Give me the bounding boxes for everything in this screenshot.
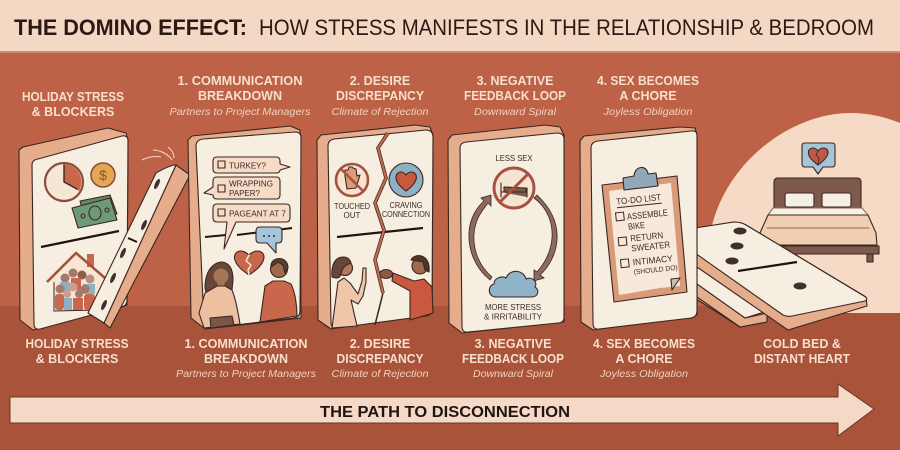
text: craving connection: CONNECTION <box>382 210 430 219</box>
icon: clipboard <box>602 167 687 302</box>
labels: bottom row <box>26 337 850 380</box>
icon: heart in circle <box>389 163 423 197</box>
icon: clock <box>45 163 83 201</box>
domino 2: communication breakdown <box>188 126 301 329</box>
to-do list text: ASSEMBLE <box>626 208 668 222</box>
labels: top row: A CHORE <box>619 89 677 103</box>
labels: bottom row: 3. NEGATIVE <box>475 337 551 351</box>
labels: top row: FEEDBACK LOOP <box>464 89 566 103</box>
to-do list text: INTIMACY <box>632 253 673 267</box>
bubble: pageant at 7: PAGEANT AT 7 <box>229 210 287 218</box>
labels: top row <box>22 74 699 119</box>
labels: top row: Partners to Project Managers <box>170 106 311 118</box>
labels: top row: 1. COMMUNICATION <box>178 74 302 88</box>
text: touched out <box>334 202 370 220</box>
labels: bottom row: 1. COMMUNICATION <box>184 337 308 351</box>
to-do list text: (SHOULD DO) <box>634 265 678 276</box>
bubble: ellipsis <box>256 227 282 253</box>
labels: bottom row: FEEDBACK LOOP <box>462 352 564 366</box>
labels: top row: 4. SEX BECOMES <box>597 74 699 88</box>
domino: fallen upper <box>695 222 867 330</box>
bubble: wrapping paper <box>204 177 280 199</box>
icon: coin: $ <box>99 167 107 183</box>
arrow: the path to disconnection: THE PATH TO DISCONNECTION <box>320 404 570 421</box>
labels: top row: DISCREPANCY <box>336 89 425 103</box>
labels: top row: 3. NEGATIVE <box>477 74 553 88</box>
icon: bed <box>760 178 879 262</box>
motion lines <box>142 147 174 160</box>
bubble: turkey: TURKEY? <box>229 162 267 170</box>
labels: top row: Joyless Obligation <box>602 106 693 118</box>
text: more stress and irritability: & IRRITABILITY <box>484 312 542 322</box>
to-do list text: RETURN <box>630 230 664 244</box>
text: touched out: TOUCHED <box>334 202 370 211</box>
icon: hand with prohibition <box>336 164 368 196</box>
icon: no bed <box>494 168 534 208</box>
bed scene backdrop <box>709 113 900 313</box>
figure: woman <box>199 262 240 328</box>
text: touched out: OUT <box>344 211 361 220</box>
text: craving connection <box>382 201 430 219</box>
labels: bottom row: BREAKDOWN <box>204 352 288 366</box>
bubble: turkey <box>213 157 290 173</box>
icon: money <box>72 195 117 228</box>
header band <box>0 0 900 53</box>
to-do list text: TO-DO LIST <box>616 192 662 207</box>
text: craving connection: CRAVING <box>390 201 422 210</box>
bubble: wrapping paper: WRAPPING <box>229 180 273 188</box>
labels: bottom row: COLD BED & <box>763 337 841 351</box>
labels: bottom row: Partners to Project Managers <box>176 368 317 380</box>
labels: top row: Climate of Rejection <box>332 106 429 118</box>
labels: top row: & BLOCKERS <box>32 105 114 119</box>
text: more stress and irritability <box>484 302 542 322</box>
labels: bottom row: HOLIDAY STRESS <box>26 337 128 351</box>
labels: bottom row: & BLOCKERS <box>36 352 118 366</box>
domino 4: negative feedback loop <box>448 125 564 333</box>
bubble: wrapping paper: PAPER? <box>229 189 261 198</box>
figure: man <box>260 258 297 322</box>
labels: top row: BREAKDOWN <box>198 89 282 103</box>
arrow: left arc <box>469 195 492 280</box>
text: more stress and irritability: MORE STRESS <box>485 302 541 312</box>
domino 5: sex becomes a chore <box>580 127 697 330</box>
labels: bottom row: 4. SEX BECOMES <box>593 337 695 351</box>
icon: speech bubble with broken heart <box>802 143 835 174</box>
text: less sex: LESS SEX <box>496 153 533 163</box>
labels: bottom row: A CHORE <box>615 352 673 366</box>
domino: fallen lower <box>690 268 767 327</box>
labels: bottom row: DISTANT HEART <box>754 352 850 366</box>
domino: falling <box>88 165 190 328</box>
to-do list text: SWEATER <box>631 239 671 253</box>
labels: bottom row: Joyless Obligation <box>599 368 688 380</box>
title: THE DOMINO EFFECT: <box>14 15 247 40</box>
clipboard clip <box>623 167 658 190</box>
arrow: the path to disconnection <box>10 384 874 436</box>
figure: man reaching out <box>380 256 433 320</box>
icon: cloud <box>489 271 538 297</box>
crack <box>375 133 388 325</box>
labels: top row: Downward Spiral <box>474 106 557 118</box>
to-do list text <box>614 191 678 278</box>
icon: coin <box>91 163 115 187</box>
to-do list text: BIKE <box>628 220 645 232</box>
domino 1: holiday stress and blockers <box>19 128 128 330</box>
labels: top row: 2. DESIRE <box>350 74 410 88</box>
labels: bottom row: 2. DESIRE <box>350 337 410 351</box>
labels: bottom row: Climate of Rejection <box>332 368 429 380</box>
figure: woman with raised hand <box>332 257 366 328</box>
labels: top row: HOLIDAY STRESS <box>22 90 124 104</box>
arrow: right arc <box>534 195 557 281</box>
bubble: pageant at 7 <box>213 204 290 249</box>
domino 3: desire discrepancy <box>317 125 433 329</box>
icon: house with crowded family <box>47 253 105 312</box>
icon: broken heart <box>234 251 264 275</box>
title <box>14 15 874 40</box>
labels: bottom row: DISCREPANCY <box>336 352 424 366</box>
labels: bottom row: Downward Spiral <box>473 368 554 380</box>
